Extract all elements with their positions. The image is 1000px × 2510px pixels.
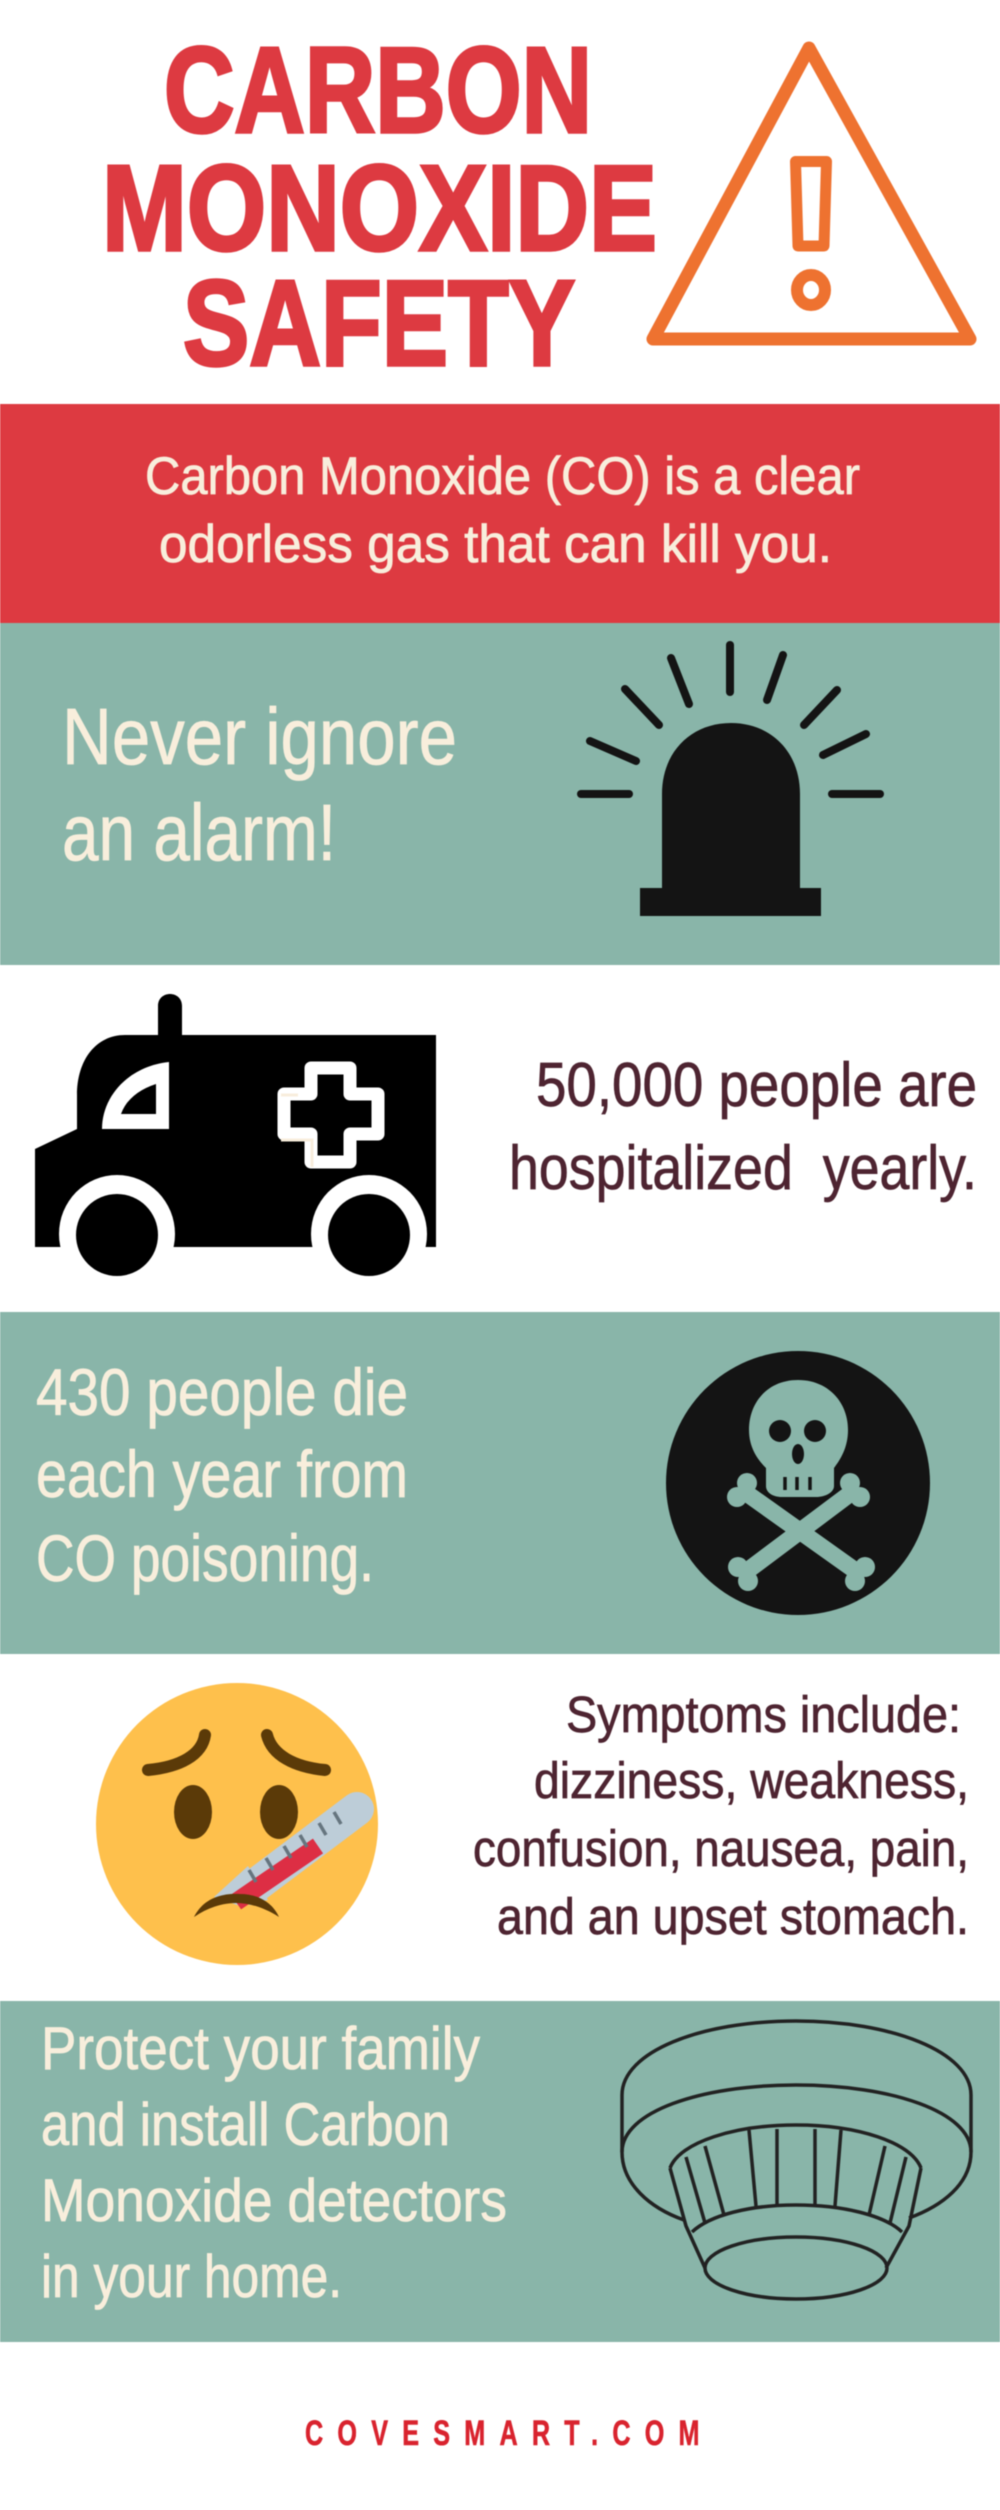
text: 430 deaths: 430 people die [36,1355,408,1429]
text: symptoms list: Symptoms include: [566,1686,961,1743]
icon: warning triangle [653,48,970,339]
text: 430 deaths: each year from [36,1437,408,1511]
text: 50,000 hospitalized [509,1051,977,1203]
text: never ignore an alarm [62,692,457,877]
text: install detectors: Protect your family [41,2015,480,2082]
icon: sick face emoji [96,1683,378,1965]
title: CARBON [164,22,592,158]
text: symptoms list [473,1686,969,1945]
title: SAFETY [183,255,575,391]
text: install detectors [41,2015,507,2310]
panel: symptoms [96,1683,969,1965]
panel: deaths [0,1312,1000,1654]
icon: CO detector [622,2021,971,2299]
text: CO definition [145,447,860,574]
icon: siren [581,645,880,916]
text: CO definition: Carbon Monoxide (CO) is a clear [145,447,860,506]
text: symptoms list: dizziness, weakness, [534,1752,969,1809]
text: symptoms list: and an upset stomach. [497,1888,969,1945]
title: MONOXIDE [102,140,657,276]
text: never ignore an alarm: Never ignore [62,692,457,781]
panel: alarm [0,623,1000,965]
text: install detectors: and install Carbon [41,2091,450,2158]
text: install detectors: Monoxide detectors [41,2167,507,2234]
footer: website: COVESMART.COM [305,2414,700,2453]
panel: detectors [0,2001,1000,2342]
text: 430 deaths [36,1355,408,1595]
panel: intro band [0,404,1000,623]
title [102,22,657,391]
text: 430 deaths: CO poisoning. [36,1521,374,1595]
text: install detectors: in your home. [41,2243,342,2310]
panel: hospitalized [35,994,977,1293]
icon: ambulance [35,994,436,1293]
icon: skull and crossbones [666,1351,930,1615]
text: never ignore an alarm: an alarm! [62,788,336,877]
text: CO definition: odorless gas that can kill you. [159,515,832,574]
